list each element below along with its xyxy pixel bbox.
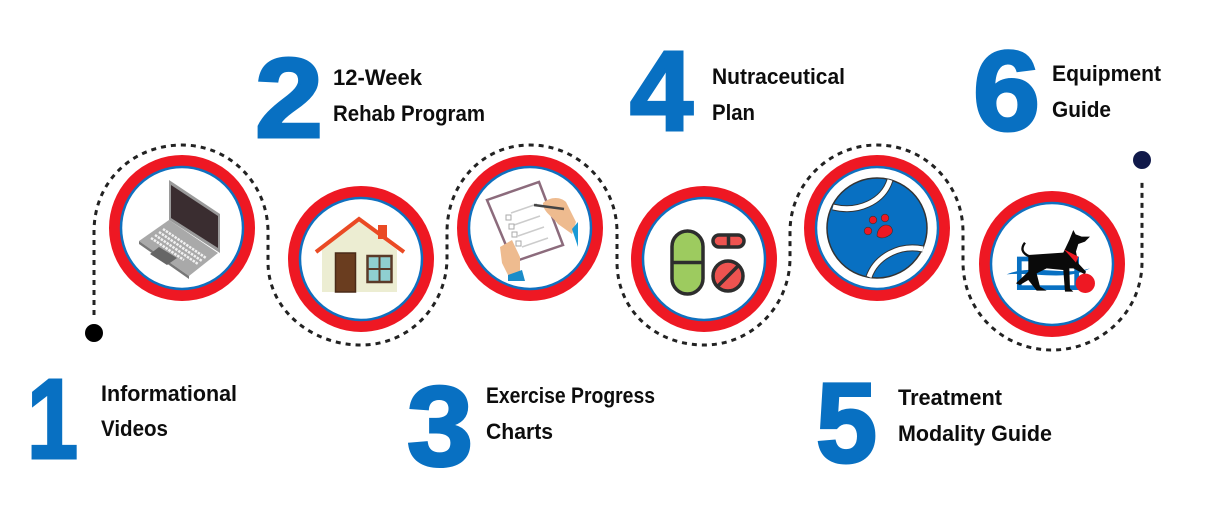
number 4: 4 xyxy=(630,28,693,154)
ring 5 xyxy=(810,161,944,295)
label 6 xyxy=(1052,61,1162,122)
step 3: exercise progress charts xyxy=(407,161,655,489)
label 1 xyxy=(101,381,237,441)
icon: dog with ball xyxy=(1007,230,1095,293)
number 2: 2 xyxy=(255,35,323,161)
ring 4 xyxy=(637,192,771,326)
label 3 xyxy=(486,383,655,444)
step 5: treatment modality guide xyxy=(810,161,1052,486)
step 1: informational videos xyxy=(27,161,249,482)
icon: pills xyxy=(672,231,744,294)
label 4: Plan xyxy=(712,100,755,125)
label 2: 12-Week xyxy=(333,65,423,90)
label 1: Videos xyxy=(101,416,168,441)
start dot xyxy=(85,324,103,342)
ring 2 xyxy=(294,192,428,326)
end dot xyxy=(1133,151,1151,169)
label 5: Modality Guide xyxy=(898,421,1052,446)
ring 1 xyxy=(115,161,249,295)
label 6: Guide xyxy=(1052,97,1111,122)
label 1: Informational xyxy=(101,381,237,406)
label 4: Nutraceutical xyxy=(712,64,845,89)
step 6: equipment guide xyxy=(973,28,1162,331)
icon: house xyxy=(316,219,404,292)
number 1: 1 xyxy=(27,356,78,482)
label 4 xyxy=(712,64,845,125)
number 6: 6 xyxy=(973,28,1040,154)
label 5: Treatment xyxy=(898,385,1003,410)
ring 3 xyxy=(463,161,597,295)
label 5 xyxy=(898,385,1052,446)
icon: laptop xyxy=(139,180,220,279)
label 6: Equipment xyxy=(1052,61,1162,86)
number 3: 3 xyxy=(407,363,473,489)
ring 6 xyxy=(985,197,1119,331)
step 4: nutraceutical plan xyxy=(630,28,845,326)
icon: tennis ball with paw xyxy=(827,178,927,278)
label 3: Exercise Progress xyxy=(486,383,655,408)
number 5: 5 xyxy=(816,360,877,486)
step 2: 12-week rehab program xyxy=(255,35,485,326)
label 3: Charts xyxy=(486,419,553,444)
label 2: Rehab Program xyxy=(333,101,485,126)
label 2 xyxy=(333,65,485,126)
dashed path xyxy=(94,145,1142,350)
icon: clipboard and hand xyxy=(487,182,578,281)
